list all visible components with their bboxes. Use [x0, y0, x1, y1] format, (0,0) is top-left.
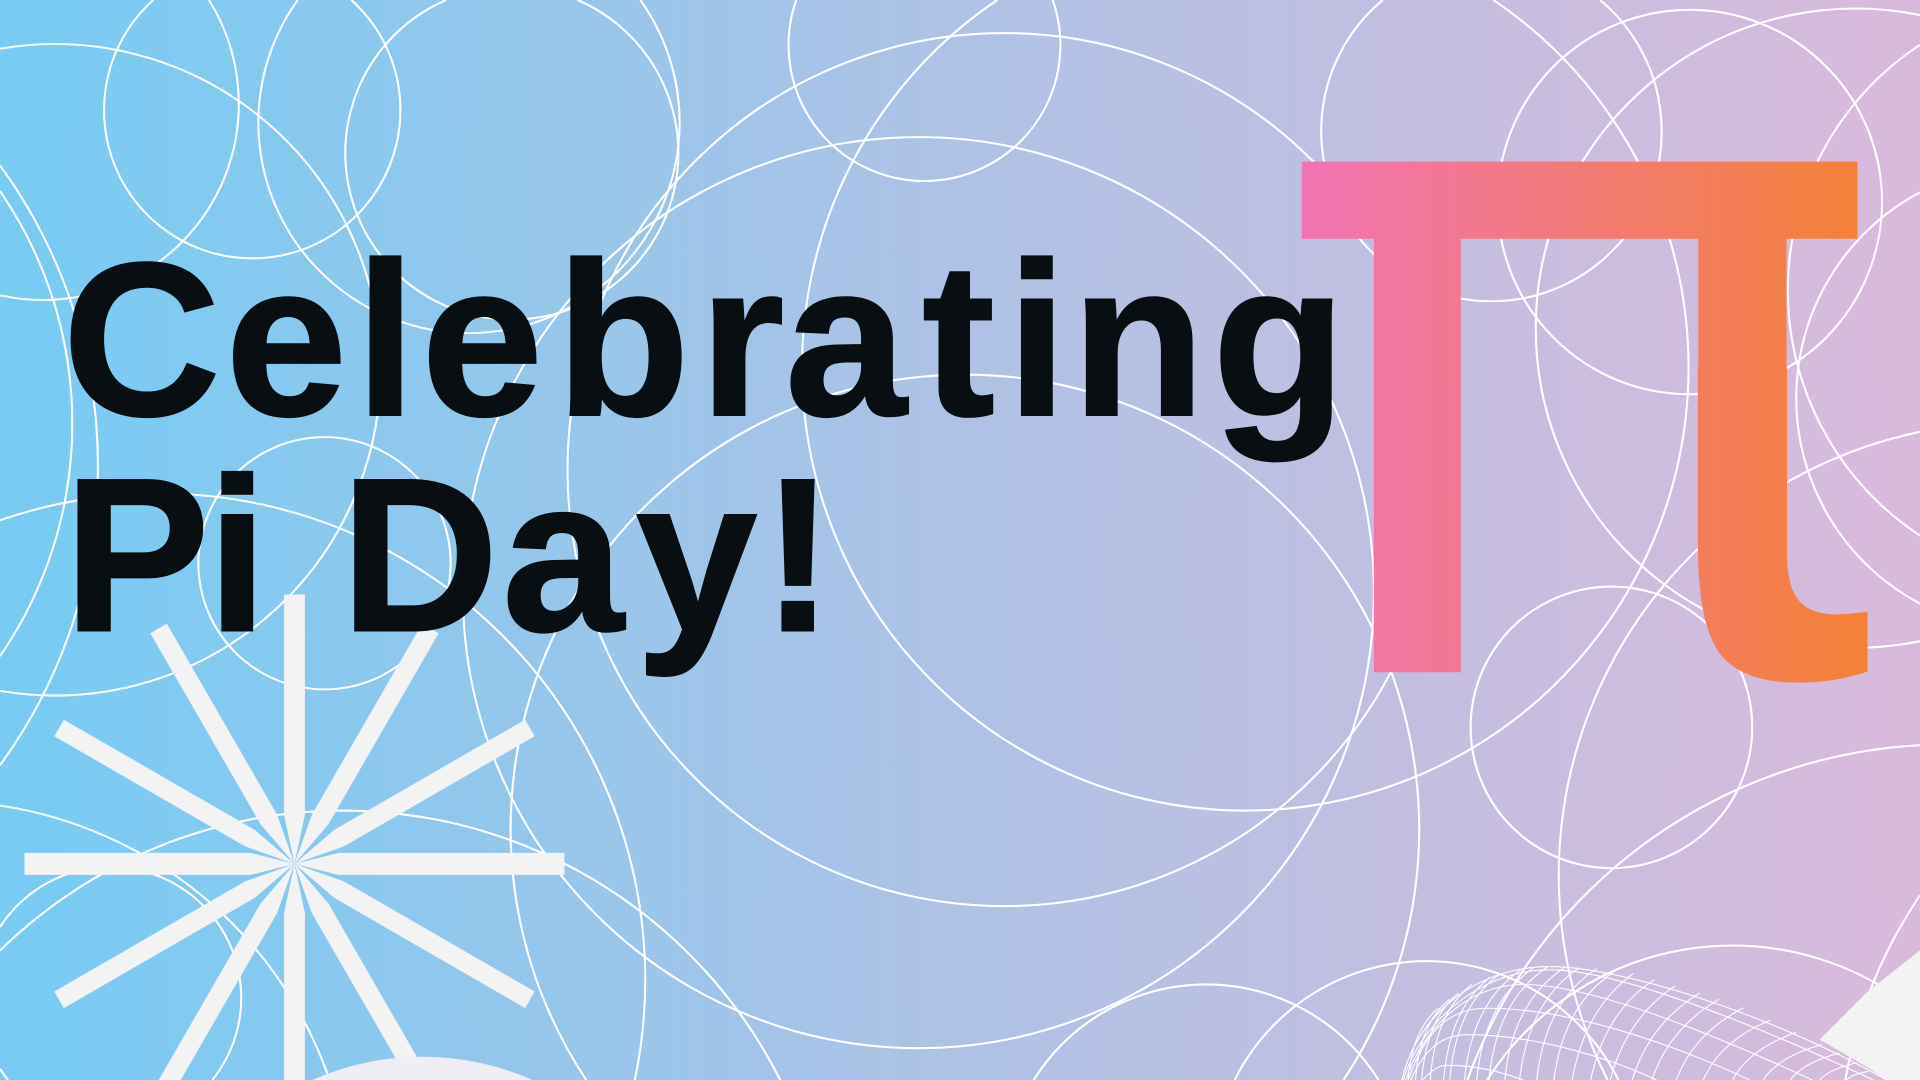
pi symbol	[1302, 162, 1868, 683]
title	[62, 218, 1346, 678]
starburst icon	[24, 594, 564, 1080]
title line 2: Pi Day!	[64, 434, 835, 678]
pale semicircle at bottom edge	[312, 1057, 533, 1080]
wireframe tube	[1402, 967, 1887, 1080]
pale corner wedge	[1820, 950, 1920, 1080]
title line 1: Celebrating	[62, 218, 1346, 462]
